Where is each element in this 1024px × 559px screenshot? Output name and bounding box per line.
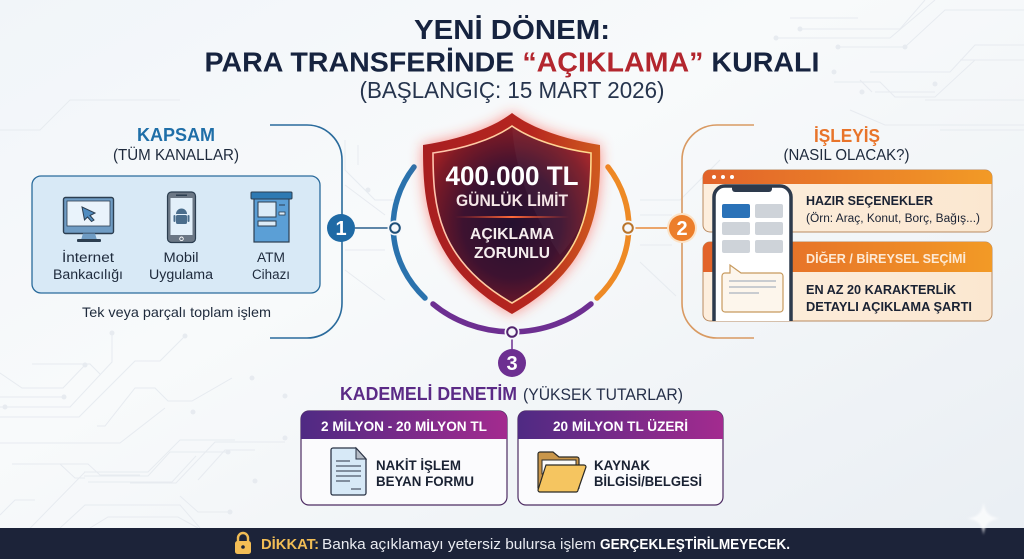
title bbox=[204, 14, 820, 103]
icon: folder bbox=[538, 452, 586, 492]
connector 1 bbox=[355, 220, 402, 236]
heading: kapsam: KAPSAM bbox=[137, 125, 215, 145]
card: hazır seçenekler: HAZIR SEÇENEKLER bbox=[806, 193, 934, 208]
footer warning bar: DİKKAT: bbox=[261, 536, 319, 553]
channels box bbox=[32, 176, 320, 293]
shield text: limit: 400.000 TL bbox=[446, 161, 578, 191]
footer warning bar: GERÇEKLEŞTİRİLMEYECEK. bbox=[600, 536, 790, 553]
card: hazır seçenekler bbox=[703, 170, 992, 232]
shield text: explanation required: AÇIKLAMA bbox=[470, 226, 554, 243]
card: diğer / bireysel seçimi: DİĞER / BİREYSEL SEÇİMİ bbox=[806, 251, 966, 266]
icon: ATM bbox=[251, 192, 292, 242]
channel labels: Uygulama bbox=[149, 267, 214, 282]
title: YENİ DÖNEM: bbox=[414, 14, 610, 45]
subheading: yüksek tutarlar: (YÜKSEK TUTARLAR) bbox=[523, 385, 683, 404]
channel labels: Bankacılığı bbox=[53, 267, 123, 282]
shield bbox=[423, 113, 600, 314]
subheading: nasıl olacak: (NASIL OLACAK?) bbox=[784, 147, 910, 164]
channel labels: ATM bbox=[257, 250, 285, 265]
card: 2-20 milyon: BEYAN FORMU bbox=[376, 474, 474, 489]
subheading: tüm kanallar: (TÜM KANALLAR) bbox=[113, 146, 239, 164]
card: 20 milyon üzeri bbox=[518, 411, 723, 505]
footer warning bar bbox=[0, 528, 1024, 559]
icon: monitor bbox=[64, 198, 114, 242]
shield: ZORUNLU bbox=[474, 245, 550, 262]
card: 20 milyon üzeri: 20 MİLYON TL ÜZERİ bbox=[553, 418, 688, 434]
card: diğer / bireysel seçimi: DETAYLI AÇIKLAMA ŞARTI bbox=[806, 299, 972, 314]
title: PARA TRANSFERİNDE “AÇIKLAMA” KURALI bbox=[204, 46, 820, 78]
channel labels: Mobil bbox=[164, 250, 198, 265]
channel labels: Cihazı bbox=[252, 267, 290, 282]
card: 2-20 milyon: NAKİT İŞLEM bbox=[376, 458, 461, 473]
card: 2-20 milyon bbox=[301, 411, 507, 505]
card: hazır seçenekler: (Örn: Araç, Konut, Borç, Bağış...) bbox=[806, 213, 980, 225]
card: 20 milyon üzeri: KAYNAK bbox=[594, 458, 650, 473]
icon: mobile phone bbox=[168, 192, 196, 242]
panel: işleyiş bbox=[682, 125, 992, 338]
heading: işleyiş: İŞLEYİŞ bbox=[814, 126, 880, 146]
badge 3 bbox=[498, 349, 526, 377]
caption: Tek veya parçalı toplam işlem bbox=[82, 304, 271, 320]
title: (BAŞLANGIÇ: 15 MART 2026) bbox=[360, 77, 664, 103]
icon: smartphone bbox=[714, 185, 791, 321]
connector 3 bbox=[504, 324, 520, 350]
badge 2 bbox=[667, 213, 697, 243]
badge 1: 1 bbox=[335, 218, 347, 240]
badge 1 bbox=[327, 214, 355, 242]
card: 2-20 milyon: 2 MİLYON - 20 MİLYON TL bbox=[321, 418, 487, 434]
shield text: daily limit: GÜNLÜK LİMİT bbox=[456, 191, 568, 210]
card: diğer / bireysel seçimi bbox=[703, 242, 992, 321]
heading: kademeli denetim: KADEMELİ DENETİM bbox=[340, 383, 517, 404]
badge 3: 3 bbox=[506, 353, 518, 375]
footer warning bar: Banka açıklamayı yetersiz bulursa işlem bbox=[322, 537, 596, 553]
card: 20 milyon üzeri: BİLGİSİ/BELGESİ bbox=[594, 474, 702, 489]
channel labels: İnternet bbox=[62, 250, 114, 265]
ring around shield bbox=[393, 167, 629, 332]
icon: document bbox=[331, 448, 366, 495]
icon: sparkle watermark bbox=[967, 502, 1000, 535]
connector 2 bbox=[620, 220, 668, 236]
card: diğer / bireysel seçimi: EN AZ 20 KARAKTERLİK bbox=[806, 282, 957, 297]
badge 2: 2 bbox=[676, 218, 688, 240]
panel: kapsam bbox=[32, 125, 342, 338]
icon: padlock bbox=[235, 533, 251, 554]
channel labels bbox=[53, 250, 290, 282]
panel: kademeli denetim bbox=[301, 383, 723, 505]
